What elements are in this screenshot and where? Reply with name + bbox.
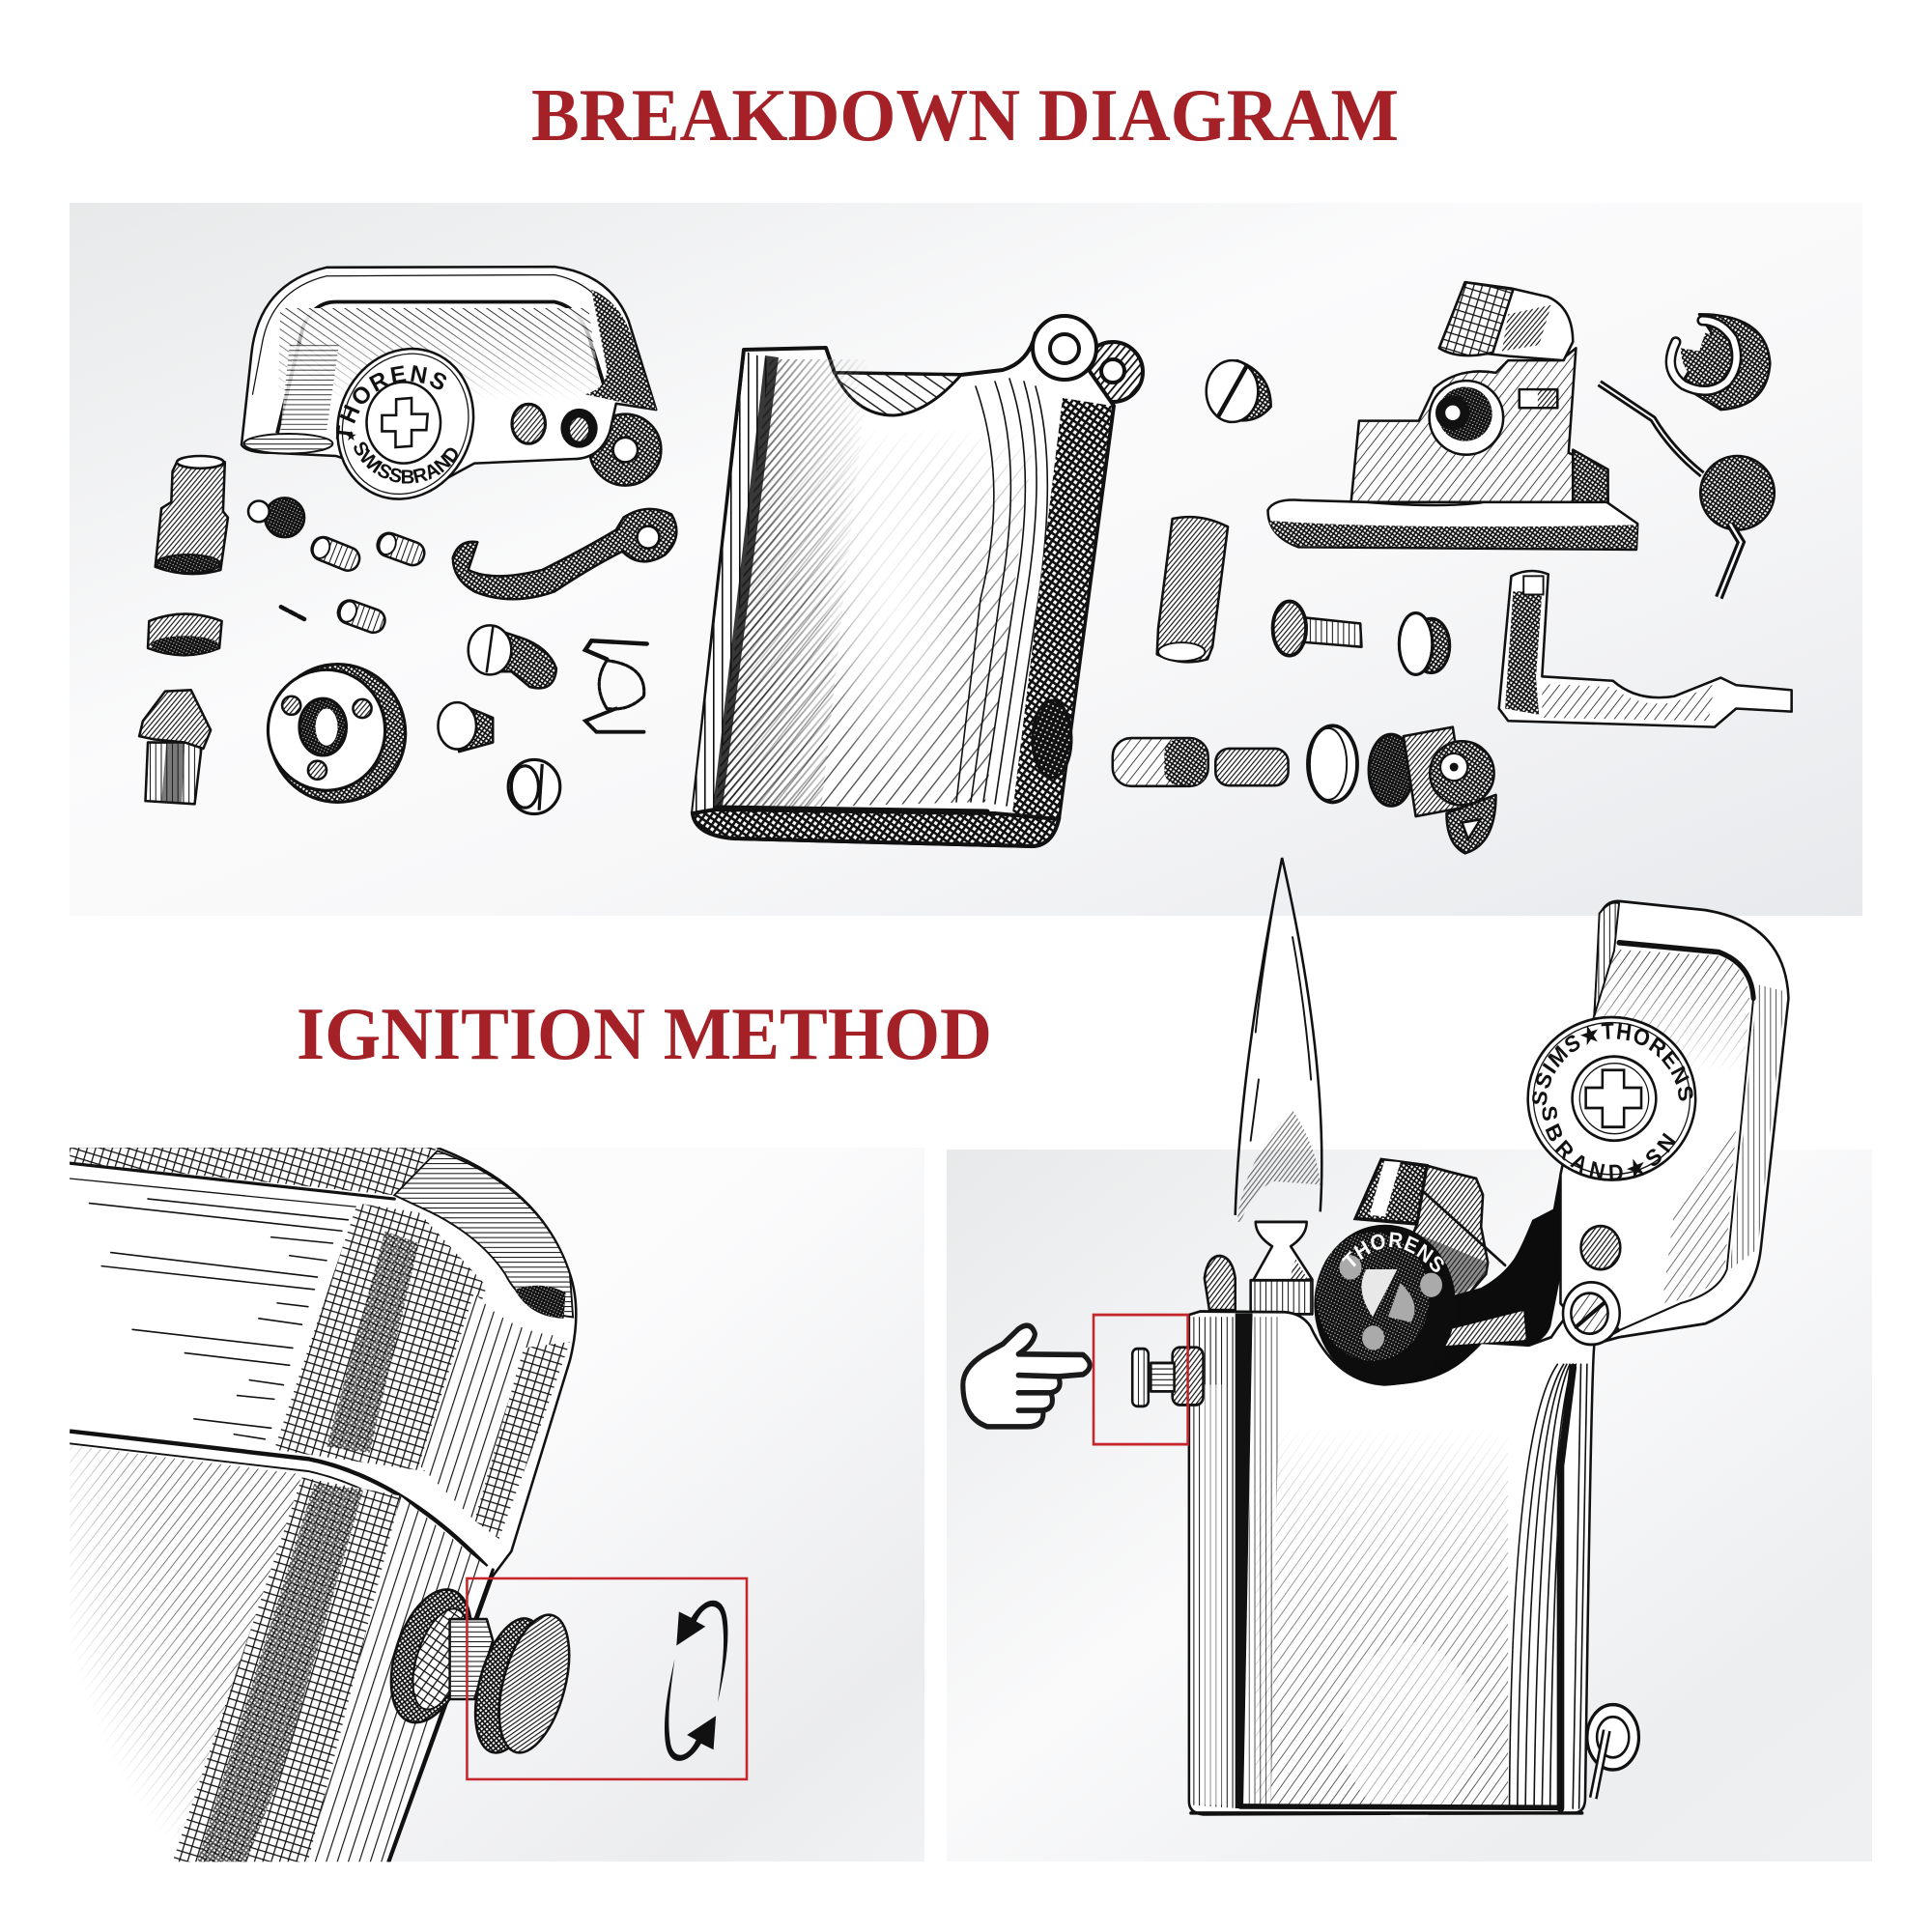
big case silhouette <box>62 1148 576 1865</box>
top knurled strip <box>70 1148 438 1195</box>
panel: ignition closeup background <box>70 1148 924 1861</box>
part: c clip <box>1670 314 1770 410</box>
left side band <box>1191 1317 1237 1808</box>
part: tiny pin <box>281 607 304 619</box>
part: l lever <box>1499 571 1792 727</box>
thumbwheel small <box>1132 1348 1204 1406</box>
rivet <box>512 404 545 443</box>
parts left of case <box>137 265 678 815</box>
striker wheel <box>1314 1225 1455 1383</box>
hinge lug front <box>1033 316 1096 380</box>
mechanism top flap <box>1355 1159 1505 1303</box>
wheel holes <box>1340 1255 1361 1280</box>
case right shaded side <box>1012 398 1112 819</box>
lid top opening <box>1595 902 1619 1015</box>
lid inner hatching <box>277 302 607 433</box>
wheel centre <box>1361 1269 1397 1317</box>
crosshatched corner column <box>274 1204 487 1471</box>
mechanism lever black <box>1397 1172 1560 1384</box>
lid rivet <box>1581 1226 1620 1269</box>
right rim crosshatch <box>474 1342 570 1539</box>
pointing hand icon <box>963 1325 1090 1427</box>
bushing <box>560 409 598 448</box>
front hatching <box>1256 1405 1508 1804</box>
panel: lighter view background <box>947 1150 1872 1861</box>
case body <box>1189 1296 1619 1819</box>
lid lower hatching <box>1662 1127 1736 1303</box>
part: lid with medallion: SWISSBRAND <box>354 442 458 483</box>
medallion text: THORENS <box>336 365 446 439</box>
body bottom edge <box>1240 1806 1560 1807</box>
flame <box>1236 858 1321 1222</box>
open lid <box>1526 900 1790 1343</box>
highlight on front <box>821 415 966 782</box>
red highlight box <box>1094 1315 1188 1444</box>
rounded corner hatch <box>394 1151 573 1318</box>
thumbwheel base <box>376 1579 487 1733</box>
part: slotted rivet <box>1207 360 1271 422</box>
title: breakdown diagram: BREAKDOWN DIAGRAM <box>531 73 1399 156</box>
lid right rim lines <box>1730 984 1785 1269</box>
case back wall behind notch <box>835 373 961 415</box>
medallion cross <box>1586 1070 1641 1127</box>
case bottom strip <box>693 810 1059 846</box>
part: small springs <box>308 530 427 636</box>
part: nozzle <box>139 690 211 804</box>
seam <box>70 1432 487 1567</box>
wheel text: THORENS <box>1342 1232 1444 1272</box>
parts right of case <box>1113 282 1792 853</box>
lid inner line <box>1619 998 1753 1330</box>
part: flat ring <box>148 614 222 655</box>
part: split ring <box>508 759 560 814</box>
thumbwheel neck <box>450 1619 493 1699</box>
part: pin knob <box>248 497 304 537</box>
hinge screw <box>1563 1282 1620 1345</box>
lid right shaded edge <box>585 290 656 410</box>
part: striker wheel <box>268 665 406 802</box>
part: threaded tube <box>1113 738 1208 786</box>
dark column lower <box>173 1477 401 1861</box>
medallion text: SSIMS★THORENS <box>1532 1023 1693 1105</box>
part: lid with medallion <box>240 265 663 500</box>
case left side <box>693 352 770 813</box>
part: short tube <box>1215 749 1289 785</box>
key ring <box>1587 1705 1638 1798</box>
lighter open view <box>960 858 1790 1816</box>
panel: breakdown background <box>70 203 1862 916</box>
part: plug <box>438 702 493 752</box>
medallion <box>315 328 496 520</box>
case front light hatching <box>724 437 1032 807</box>
part: zigzag spring <box>585 640 647 732</box>
side dark block <box>1573 450 1608 502</box>
part: lid with medallion: ★ <box>345 429 357 444</box>
left dark line <box>1236 1314 1253 1808</box>
lever hatched highlight <box>1442 1311 1526 1346</box>
medallion cross <box>382 398 428 447</box>
part: filler screw with loop <box>1369 727 1496 853</box>
boss <box>1430 381 1503 455</box>
open lid: SBRAND★SN <box>1542 1107 1675 1179</box>
flame base hatching <box>1237 1110 1321 1222</box>
lower right long strokes <box>308 1496 487 1861</box>
heading: ignition method: IGNITION METHOD <box>297 992 992 1075</box>
flint pin <box>1205 1256 1236 1310</box>
lighter case body <box>693 316 1143 846</box>
rotation arrows <box>665 1601 727 1761</box>
flap <box>1439 282 1573 360</box>
upper face strokes <box>89 1199 348 1439</box>
fill cap <box>1251 1222 1312 1314</box>
part: flanged screw <box>1273 601 1361 656</box>
part: wick bracket <box>1268 282 1637 550</box>
part: hook arm <box>453 509 676 599</box>
front highlight <box>1342 1642 1477 1819</box>
upper plate <box>1351 348 1608 502</box>
ignition closeup <box>62 1148 747 1865</box>
case right highlight lines <box>956 379 1047 806</box>
part: slotted screw <box>469 625 556 688</box>
lid rim opening <box>244 434 332 453</box>
thumbwheel knurl <box>463 1611 557 1760</box>
window <box>1520 389 1557 408</box>
medallion <box>1528 1017 1695 1179</box>
case silhouette <box>693 333 1114 846</box>
part: thin ring <box>1308 725 1357 802</box>
part: torsion spring <box>1600 384 1775 598</box>
pendant loop <box>589 414 661 486</box>
case left dense shading <box>715 359 869 810</box>
part: grooved bushing <box>1399 613 1450 674</box>
part: tall cylinder <box>1157 517 1228 662</box>
red highlight box <box>467 1578 747 1779</box>
lower-left diagonal hatch <box>70 1445 302 1861</box>
base plate <box>1268 499 1637 550</box>
side hole <box>1033 700 1071 778</box>
thumbwheel face <box>486 1607 582 1760</box>
part: knurled sleeve <box>156 456 228 574</box>
upper right highlight strokes <box>419 1293 554 1520</box>
lid top hatching <box>1594 950 1749 1067</box>
hinge lug rear <box>1083 342 1143 402</box>
right curved lines <box>1510 1364 1587 1808</box>
